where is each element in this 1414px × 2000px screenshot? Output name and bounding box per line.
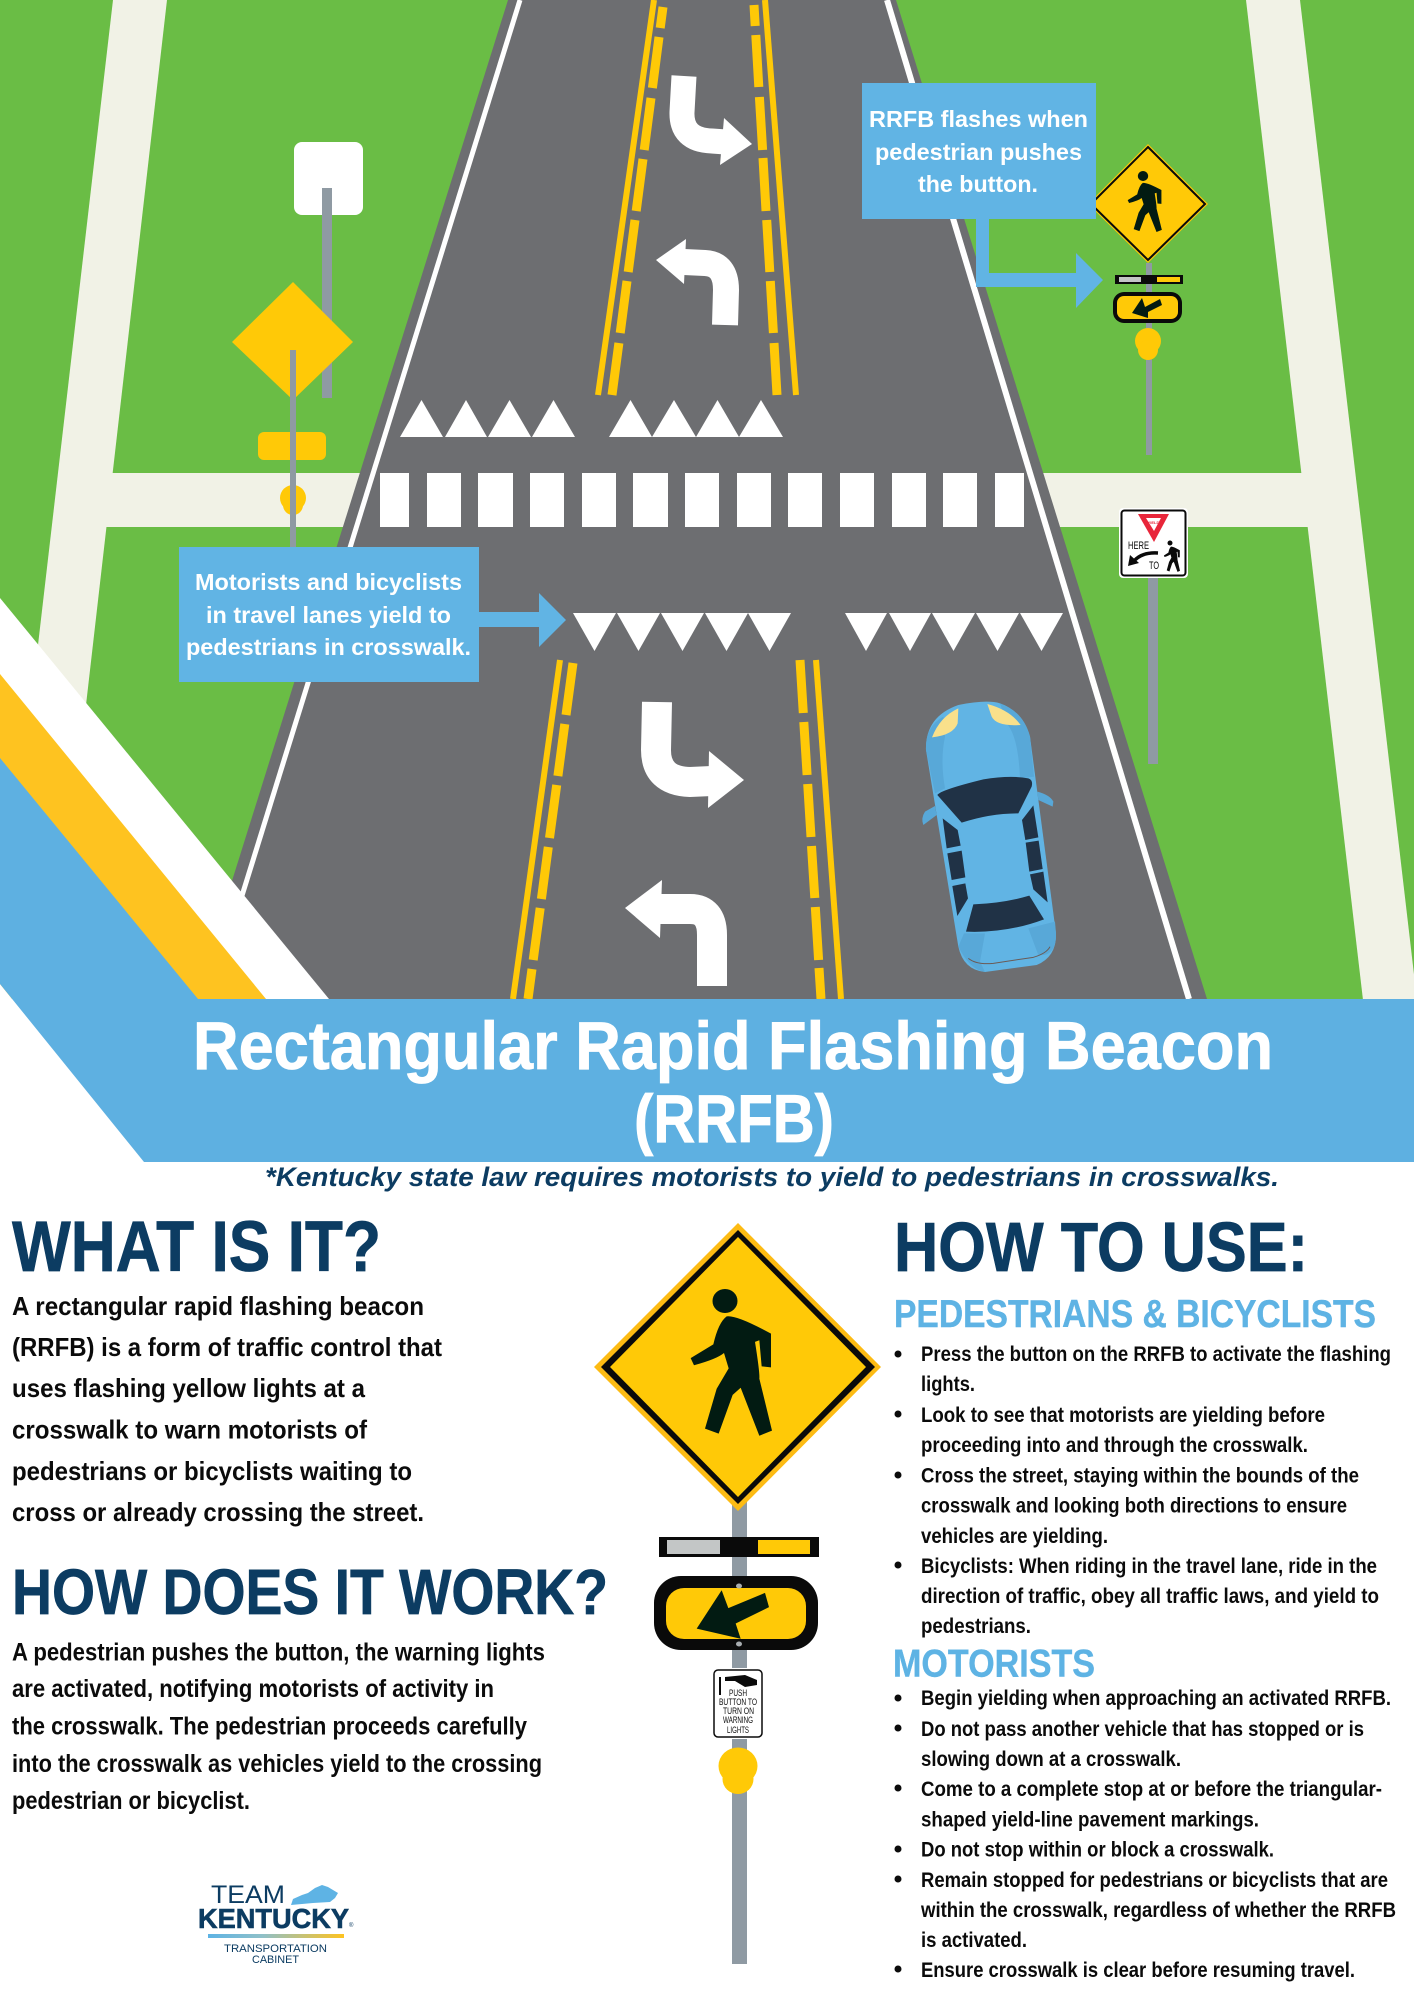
- callout: RRFB flashes: RRFB flashes when: [869, 106, 1088, 132]
- logo: Team Kentucky Transportation Cabinet: KENTUCKY: [198, 1903, 349, 1934]
- callout: motorists and bicyclists: Motorists and bicyclists: [195, 569, 462, 595]
- bullet list: motorists: [894, 1687, 1396, 1982]
- callout: RRFB flashes: the button.: [918, 171, 1038, 197]
- cross sidewalk: [105, 473, 1310, 527]
- logo: Team Kentucky Transportation Cabinet: CABINET: [252, 1954, 299, 1966]
- logo: Team Kentucky Transportation Cabinet: TEAM: [211, 1881, 285, 1909]
- logo: Team Kentucky Transportation Cabinet: TRANSPORTATION: [224, 1943, 327, 1955]
- text block: what is it: uses flashing yellow lights at a: [12, 1373, 365, 1403]
- callout: motorists and bicyclists: in travel lanes yield to: [206, 602, 451, 628]
- large RRFB sign assembly: BUTTON TO: [719, 1697, 757, 1707]
- callout: RRFB flashes: [862, 83, 1096, 219]
- bullet list: pedestrians and bicyclists: Cross the street, staying within the bounds of the: [921, 1464, 1359, 1488]
- bullet list: pedestrians and bicyclists: Look to see that motorists are yielding before: [921, 1404, 1325, 1427]
- heading: what is it: WHAT IS IT?: [12, 1208, 381, 1287]
- arrow: lower right turn: [656, 702, 744, 808]
- title banner with diagonal blue shape: [0, 758, 1414, 1162]
- heading: how does it work: HOW DOES IT WORK?: [12, 1556, 608, 1628]
- bullet list: motorists: slowing down at a crosswalk.: [921, 1748, 1181, 1771]
- callout: motorists and bicyclists: [179, 547, 479, 682]
- text block: how does it work: [12, 1638, 545, 1815]
- left far-side sign assembly (back view): [232, 142, 363, 550]
- yield here to pedestrians sign: HERE: [1128, 540, 1149, 552]
- large RRFB sign assembly: LIGHTS: [727, 1725, 749, 1735]
- text block: how does it work: into the crosswalk as vehicles yield to the crossing: [12, 1750, 542, 1778]
- diagonal band white: [0, 598, 329, 999]
- lower yellow lane lines: [513, 660, 841, 999]
- bullet list: pedestrians and bicyclists: crosswalk and looking both directions to ensure: [921, 1494, 1347, 1518]
- bullet list: pedestrians and bicyclists: [894, 1343, 1391, 1638]
- large RRFB sign assembly: WARNING: [723, 1715, 753, 1725]
- crosswalk bars: [380, 473, 1024, 527]
- road surface: [195, 0, 1207, 999]
- text block: what is it: pedestrians or bicyclists waiting to: [12, 1456, 412, 1486]
- text block: what is it: cross or already crossing the street.: [12, 1497, 424, 1527]
- panel: what is it: [12, 1208, 442, 1527]
- arrow: callout to beacon: [976, 219, 1103, 308]
- subtitle: state law note: *Kentucky state law requires motorists to yield to pedestrians in crosswalks.: [265, 1162, 1279, 1192]
- logo: Team Kentucky Transportation Cabinet: [198, 1881, 354, 1966]
- title: Rectangular Rapid Flashing Beacon: [193, 1008, 1273, 1084]
- bullet list: motorists: shaped yield-line pavement markings.: [921, 1808, 1259, 1832]
- bullet list: motorists: Do not pass another vehicle that has stopped or is: [921, 1718, 1364, 1741]
- large RRFB sign assembly: [594, 1223, 881, 1964]
- yield here to pedestrians sign: TO: [1149, 560, 1159, 572]
- bullet list: pedestrians and bicyclists: vehicles are yielding.: [921, 1525, 1108, 1548]
- street scene illustration: [0, 0, 1414, 1000]
- bullet list: pedestrians and bicyclists: pedestrians.: [921, 1615, 1031, 1638]
- text block: what is it: (RRFB) is a form of traffic control that: [12, 1332, 442, 1362]
- bullet list: motorists: Ensure crosswalk is clear before resuming travel.: [921, 1959, 1355, 1982]
- left road edge line: [236, 0, 520, 915]
- diagonal band yellow: [0, 674, 266, 999]
- yield triangles near side: [573, 613, 1063, 651]
- text block: what is it: crosswalk to warn motorists of: [12, 1414, 367, 1444]
- text block: how does it work: pedestrian or bicyclist.: [12, 1787, 250, 1815]
- right sidewalk: [1246, 0, 1414, 1000]
- text block: how does it work: are activated, notifying motorists of activity in: [12, 1675, 494, 1703]
- arrow: callout to yield markings: [478, 593, 566, 647]
- text block: how does it work: A pedestrian pushes the button, the warning lights: [12, 1638, 545, 1666]
- callout: RRFB flashes: pedestrian pushes: [875, 139, 1082, 165]
- yield here to pedestrians sign: [1119, 508, 1188, 764]
- text block: what is it: A rectangular rapid flashing beacon: [12, 1291, 424, 1321]
- heading: how to use: HOW TO USE:: [894, 1208, 1308, 1286]
- title: (RRFB): [634, 1081, 834, 1157]
- yield here to pedestrians sign: YIELD: [1148, 520, 1160, 525]
- subheading: motorists: MOTORISTS: [893, 1642, 1095, 1686]
- blue car top view: [922, 702, 1056, 972]
- arrow: upper left turn: [656, 239, 726, 325]
- left sidewalk: [38, 0, 167, 705]
- bullet list: pedestrians and bicyclists: lights.: [921, 1373, 975, 1396]
- bullet list: motorists: is activated.: [921, 1929, 1027, 1952]
- bullet list: motorists: Do not stop within or block a crosswalk.: [921, 1838, 1274, 1862]
- callout: motorists and bicyclists: pedestrians in crosswalk.: [186, 634, 471, 660]
- title: [193, 1008, 1273, 1157]
- large RRFB sign assembly: PUSH: [729, 1688, 747, 1698]
- text block: how does it work: the crosswalk. The pedestrian proceeds carefully: [12, 1712, 527, 1740]
- panel: how to use: [893, 1208, 1396, 1982]
- bullet list: pedestrians and bicyclists: proceeding into and through the crosswalk.: [921, 1434, 1308, 1457]
- right RRFB sign assembly: [1088, 144, 1208, 455]
- large RRFB sign assembly: TURN ON: [723, 1706, 754, 1716]
- panel: how does it work: [12, 1556, 608, 1815]
- arrow: lower left turn: [625, 880, 712, 986]
- yield triangles far side: [400, 400, 783, 437]
- right road edge line: [887, 0, 1189, 999]
- logo: Team Kentucky Transportation Cabinet: ®: [349, 1922, 354, 1929]
- upper yellow lane lines: [598, 0, 796, 395]
- arrow: upper right turn: [682, 76, 752, 165]
- text block: what is it: [12, 1291, 442, 1527]
